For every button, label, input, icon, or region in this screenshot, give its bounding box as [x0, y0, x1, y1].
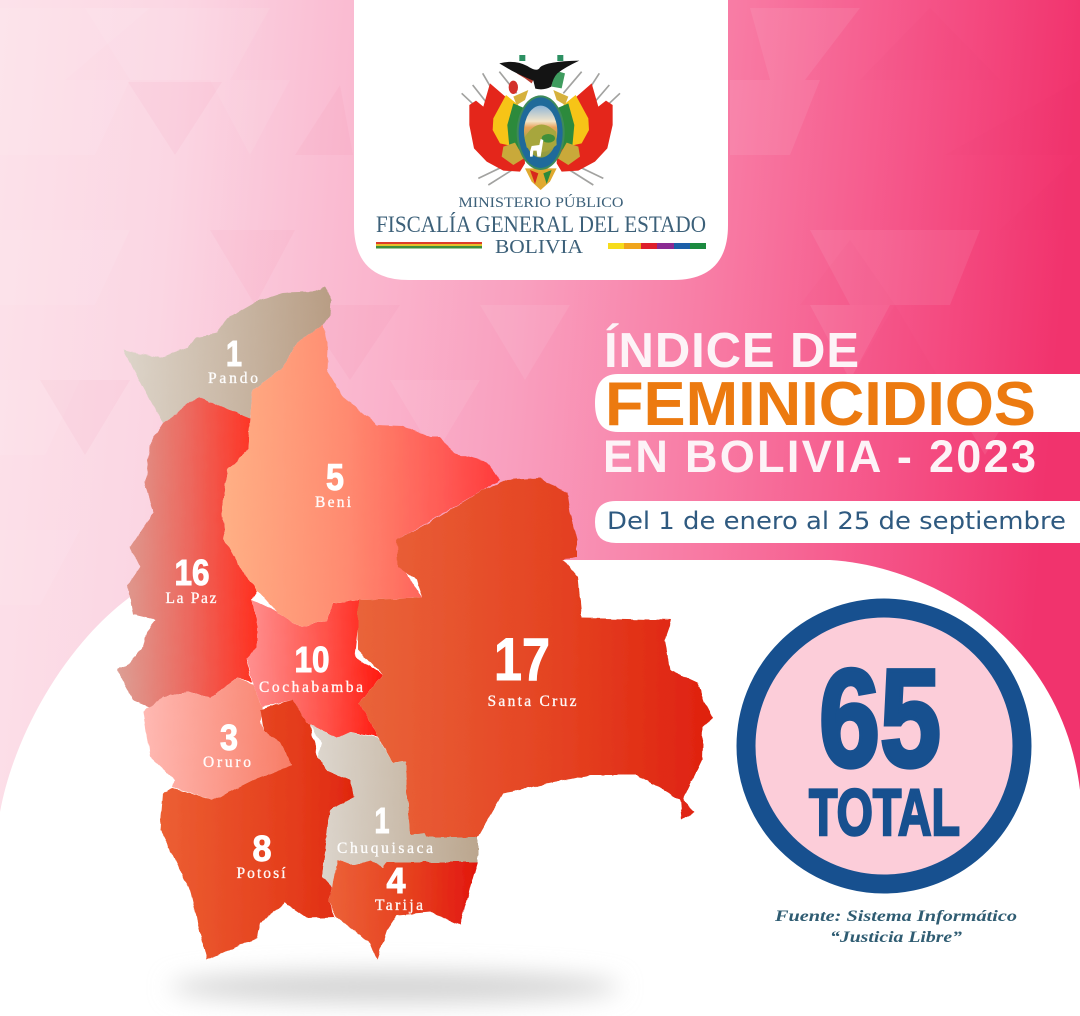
region: Potosí	[160, 700, 355, 960]
total circle	[746, 608, 1022, 884]
source note: Fuente: Sistema Informático	[774, 908, 1017, 925]
region: Santa Cruz	[358, 478, 713, 837]
region: Potosí: Potosí	[236, 865, 286, 882]
region: Pando: Pando	[208, 370, 258, 387]
heading: En Bolivia - 2023: EN BOLIVIA - 2023	[603, 431, 1036, 482]
text: Ministerio Público: MINISTERIO PÚBLICO	[458, 194, 624, 211]
icon: Bolivia coat of arms	[462, 55, 620, 190]
map shadow	[170, 971, 620, 1003]
region: Santa Cruz: 17	[494, 626, 550, 693]
pill: date range	[595, 501, 1080, 543]
wiphala stripe	[608, 243, 706, 249]
region: Pando: 1	[226, 333, 242, 374]
heading: Feminicidios: FEMINICIDIOS	[605, 370, 1036, 439]
region: Chuquisaca	[310, 725, 478, 888]
region: Beni	[222, 325, 500, 628]
region: Cochabamba: 10	[294, 639, 330, 680]
logo panel	[354, 0, 728, 280]
region: Pando	[123, 287, 331, 423]
region: Cochabamba: Cochabamba	[259, 679, 363, 696]
region: La Paz	[117, 397, 257, 708]
region: La Paz: 16	[174, 552, 210, 593]
pill: Feminicidios band	[595, 374, 1080, 432]
text: date range: Del 1 de enero al 25 de septiembre	[607, 507, 1066, 535]
region: Tarija	[328, 860, 478, 960]
region: Chuquisaca: Chuquisaca	[337, 840, 433, 857]
flag stripe	[376, 242, 482, 248]
source note	[774, 908, 1017, 946]
region: Tarija: Tarija	[375, 897, 423, 914]
region: La Paz: La Paz	[166, 590, 217, 607]
region: Tarija: 4	[386, 860, 406, 901]
region: Chuquisaca: 1	[374, 800, 390, 841]
text: Bolivia: BOLIVIA	[495, 236, 584, 258]
map of Bolivia	[117, 287, 713, 960]
region: Cochabamba	[247, 600, 382, 738]
heading: Índice de: ÍNDICE DE	[604, 324, 859, 378]
label: Total: TOTAL	[809, 775, 960, 849]
source note: “Justicia Libre”	[830, 929, 962, 946]
region: Oruro: Oruro	[203, 754, 251, 771]
white curved lower panel	[0, 560, 1080, 1016]
region: Santa Cruz: Santa Cruz	[488, 693, 577, 710]
title block	[595, 324, 1080, 543]
region: Oruro: 3	[220, 717, 238, 758]
region: Beni: 5	[326, 457, 344, 498]
region: Potosí: 8	[252, 828, 272, 869]
region: Beni: Beni	[315, 494, 352, 511]
number: 65: 65	[819, 641, 941, 796]
region: Oruro	[143, 678, 292, 800]
text: Fiscalía General del Estado: FISCALÍA GENERAL DEL ESTADO	[376, 212, 706, 237]
